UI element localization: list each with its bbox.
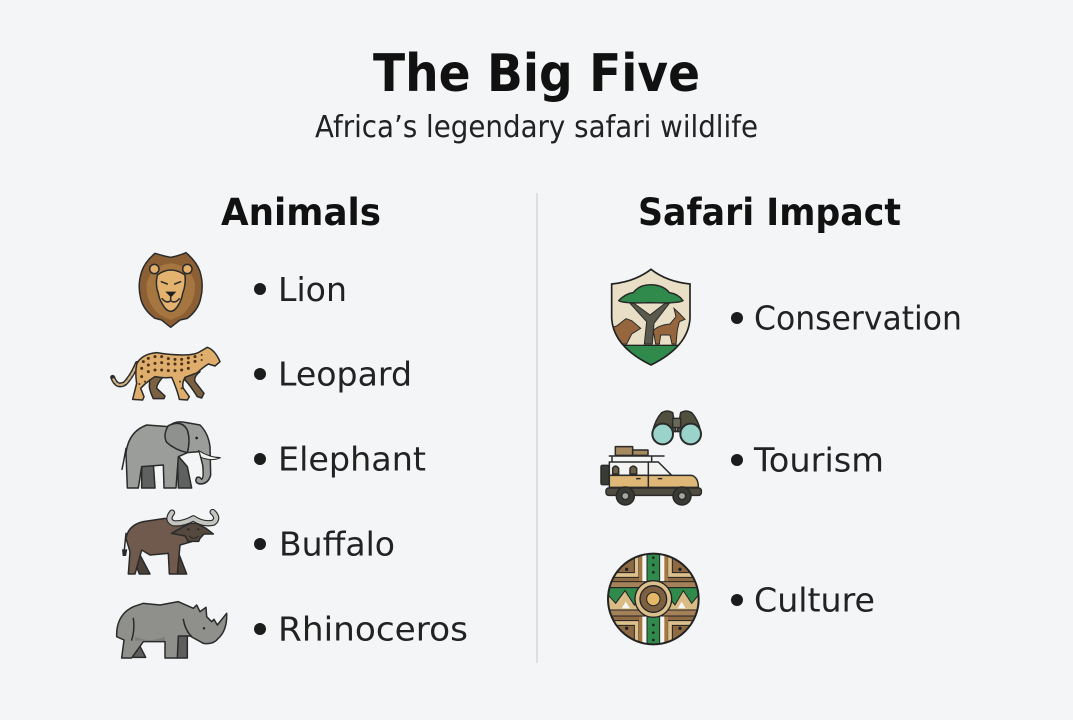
heading: safari impact: Safari Impact [638, 191, 901, 234]
icon: leopard [113, 347, 220, 400]
bullet text: culture: Culture [754, 580, 875, 620]
icon: lion [139, 253, 202, 327]
bullet text: elephant: Elephant [278, 440, 426, 478]
title: The Big Five [373, 44, 700, 104]
subtitle: Africa’s legendary safari wildlife [315, 110, 758, 145]
bullet text: conservation: Conservation [754, 298, 962, 338]
icon: elephant [122, 422, 221, 488]
icon: buffalo [122, 512, 216, 574]
icon: culture shield [607, 552, 700, 646]
heading: animals: Animals [221, 191, 381, 234]
bullet text: rhinoceros: Rhinoceros [278, 610, 468, 648]
bullet text: lion: Lion [278, 270, 347, 309]
bullet text: tourism: Tourism [753, 440, 884, 480]
bullet text: leopard: Leopard [278, 354, 412, 394]
bullet text: buffalo: Buffalo [279, 524, 395, 564]
icon: binoculars and safari vehicle [601, 411, 701, 505]
icon: rhinoceros [117, 602, 227, 658]
icon: conservation shield [610, 268, 691, 366]
